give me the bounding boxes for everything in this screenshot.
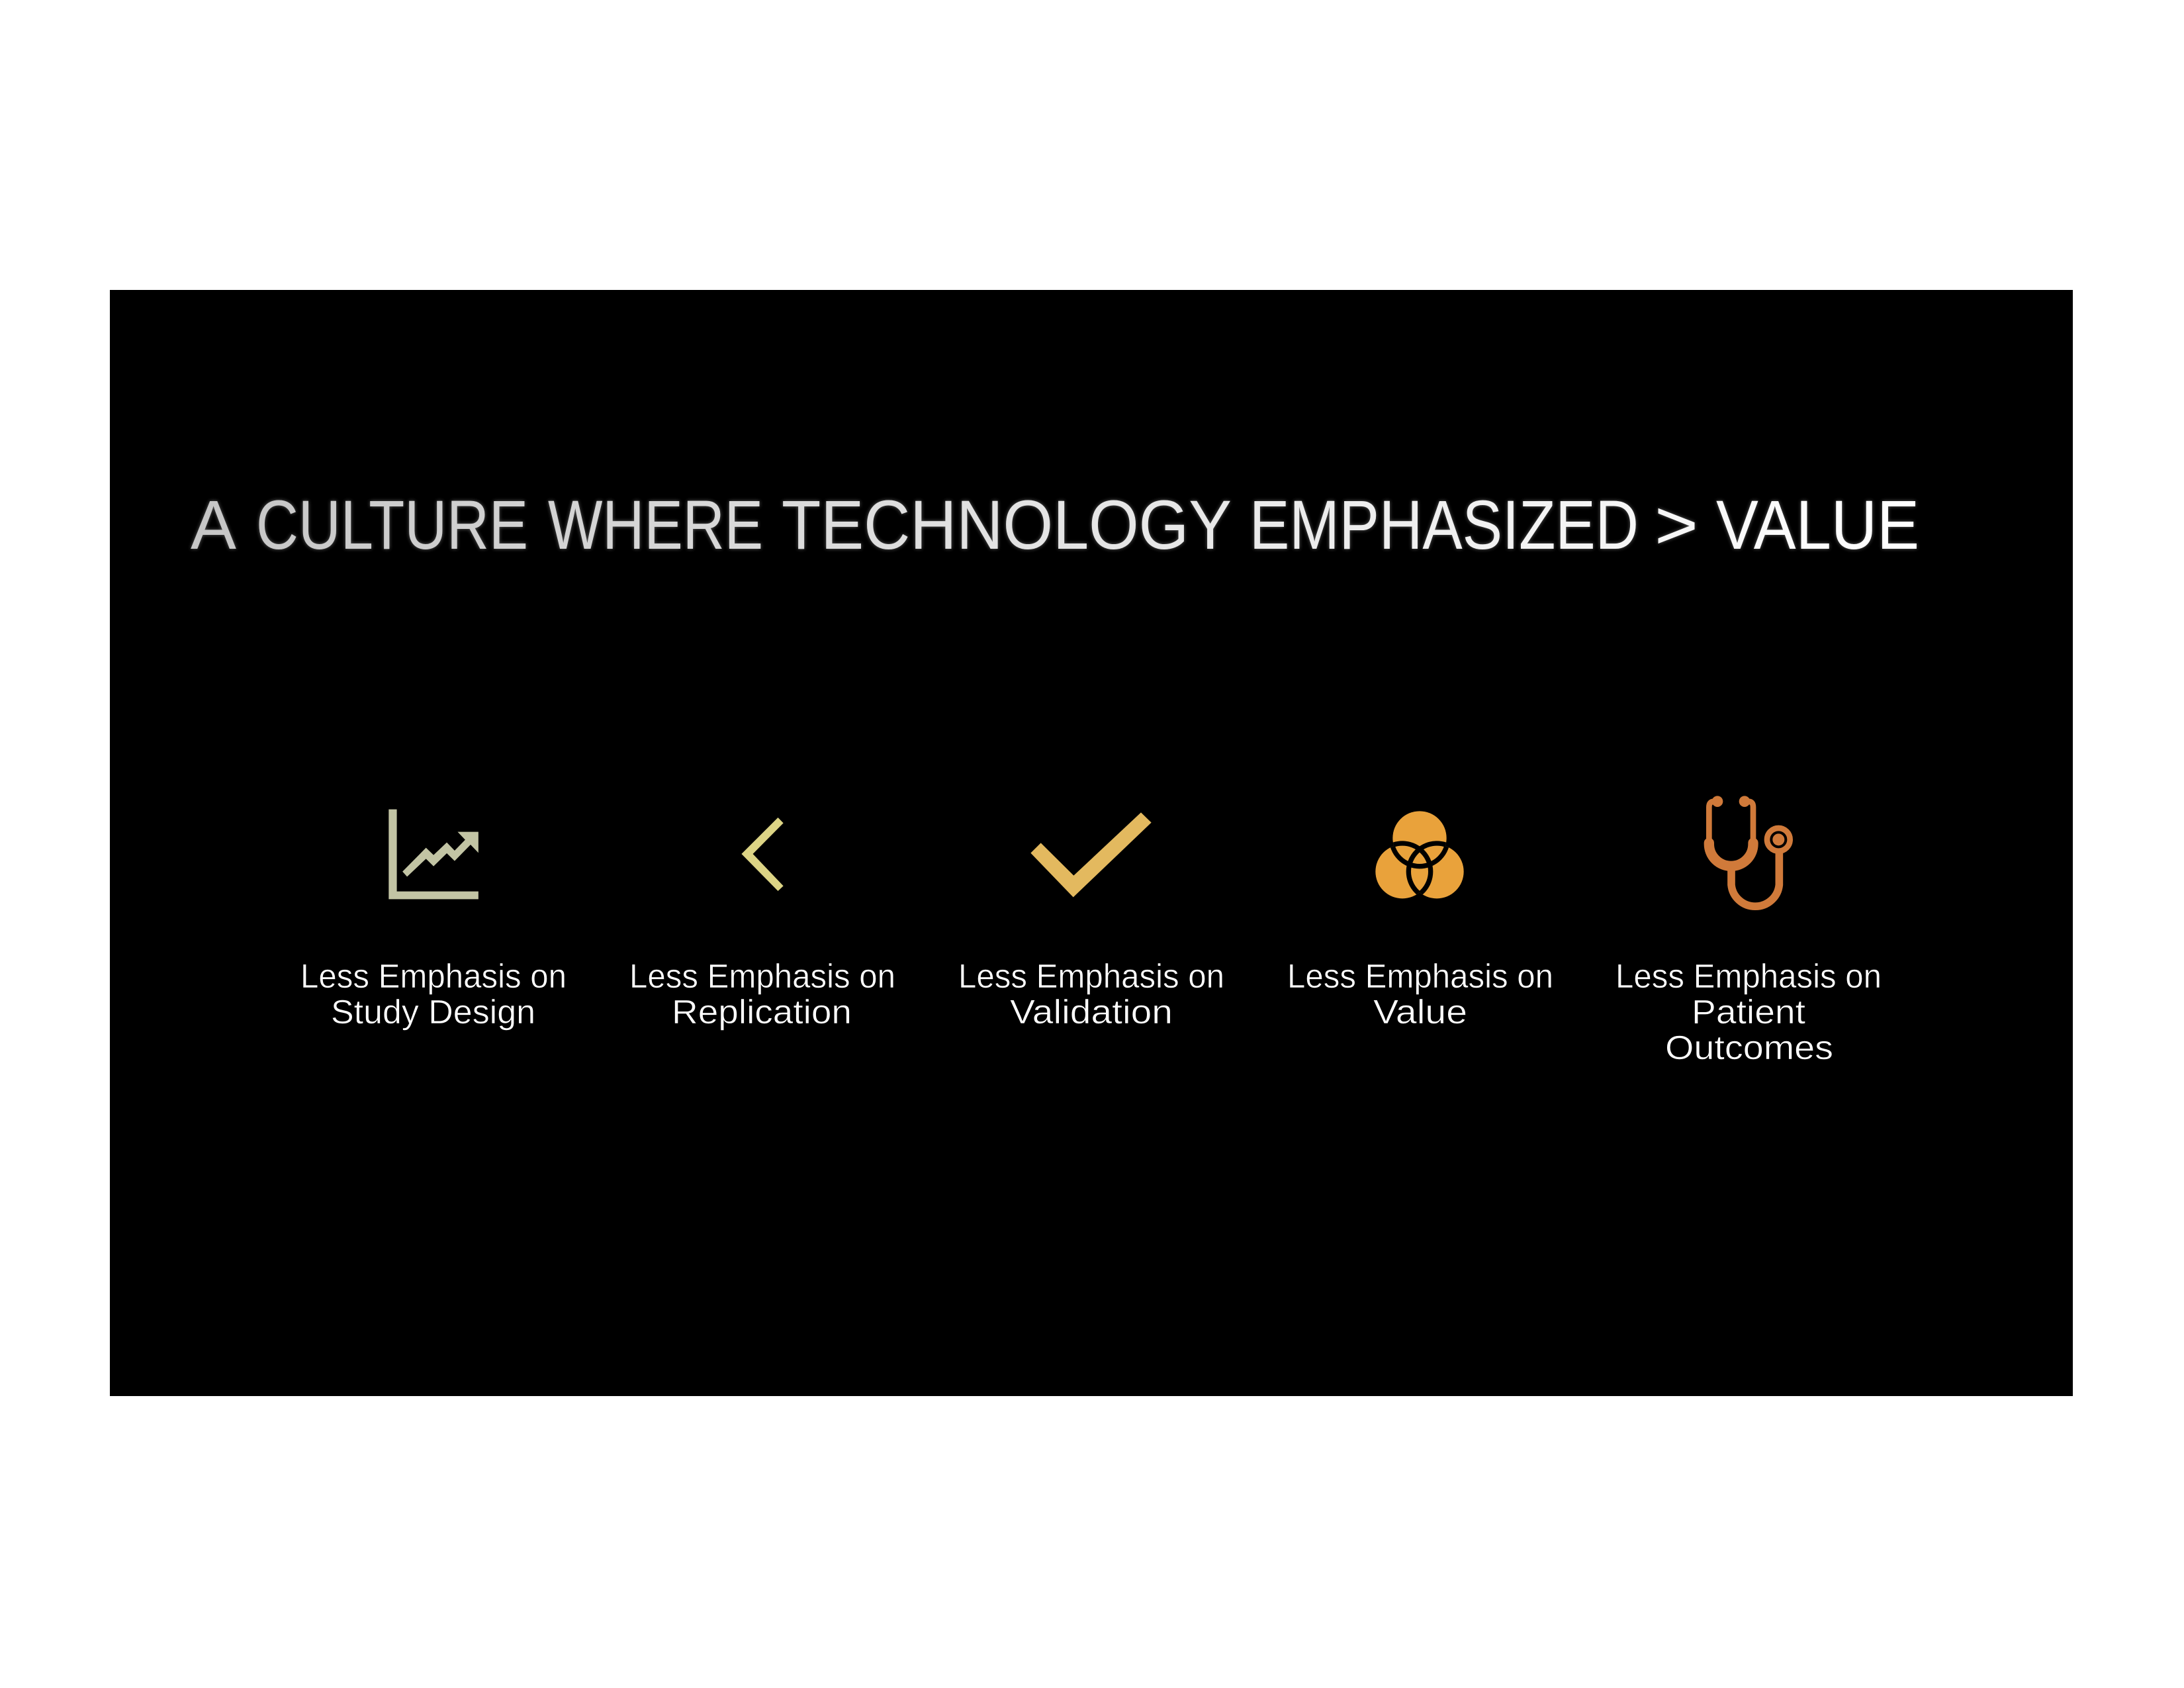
label: replication: Less Emphasis on (629, 957, 895, 995)
label: validation (958, 957, 1224, 1031)
black slide panel (110, 290, 2073, 1396)
title: A (191, 487, 236, 564)
label: patient outcomes: Patient (1692, 993, 1805, 1031)
title: TECHNOLOGY (782, 487, 1232, 564)
label: study design: Study Design (331, 993, 535, 1031)
title: > (1655, 487, 1698, 564)
icon: check mark (1030, 812, 1152, 897)
icon: line chart (388, 810, 478, 899)
label: patient outcomes: Outcomes (1665, 1029, 1833, 1066)
title: WHERE (548, 487, 763, 564)
label: value: Less Emphasis on (1287, 957, 1553, 995)
column: replication (629, 818, 895, 1031)
label: value: Value (1373, 993, 1467, 1031)
title: EMPHASIZED (1250, 487, 1639, 564)
icon: three overlapping circles (1374, 810, 1465, 900)
label: patient outcomes: Less Emphasis on (1615, 957, 1882, 995)
label: study design (300, 957, 567, 1031)
title (191, 487, 1919, 564)
label: patient outcomes (1615, 957, 1882, 1066)
label: validation: Less Emphasis on (958, 957, 1224, 995)
column: study design (300, 810, 567, 1031)
label: value (1287, 957, 1553, 1031)
label: validation: Validation (1010, 993, 1173, 1031)
icon: stethoscope (1709, 796, 1790, 906)
icon: chevron (741, 818, 784, 891)
slide canvas (110, 290, 2073, 1396)
label: study design: Less Emphasis on (300, 957, 567, 995)
label: replication (629, 957, 895, 1031)
column: validation (958, 812, 1224, 1031)
title: VALUE (1716, 487, 1919, 564)
label: replication: Replication (672, 993, 852, 1031)
title: CULTURE (256, 487, 528, 564)
column: patient outcomes (1615, 796, 1882, 1066)
column: value (1287, 810, 1553, 1031)
